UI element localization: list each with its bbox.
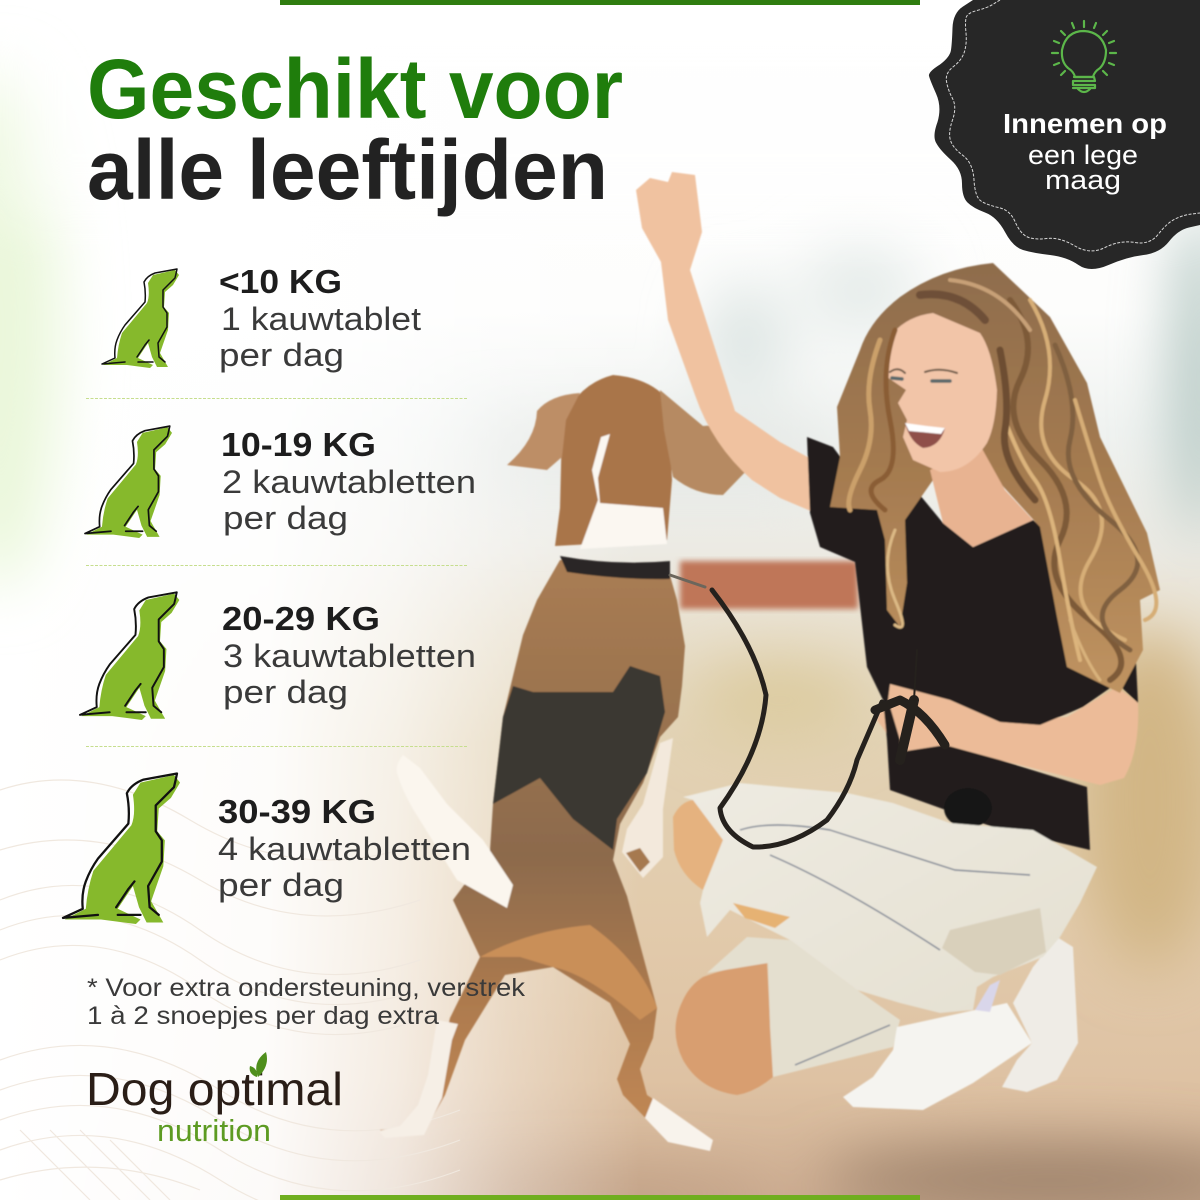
badge text [1003,108,1167,195]
icon: small dog [102,269,179,368]
footnote [87,974,526,1030]
dog collar [560,556,670,579]
row text: 2 kauwtabletten [222,464,476,500]
row text: per dag [219,337,344,373]
row text [218,793,471,903]
woman back shoe [1002,937,1078,1092]
dog rear foot right [645,1098,713,1151]
row text: per dag [223,500,348,536]
icon: extra large dog [63,774,180,924]
row text [222,600,476,710]
row text: 4 kauwtabletten [218,831,471,867]
logo [86,1052,343,1148]
woman hair strands [849,280,1156,680]
footnote: * Voor extra ondersteuning, verstrek [87,974,526,1002]
dog left ear [507,393,580,470]
woman jeans tear [733,903,790,928]
photo: woman [636,172,1160,1110]
woman upper jeans [683,783,1097,1013]
panel: dosage row 20-29 kg [80,592,476,720]
dog head and neck [555,375,672,546]
jeans seams [740,825,1030,1065]
badge text: een lege [1028,140,1138,170]
woman front shoe [843,1003,1032,1110]
panel: dosage row 30-39 kg [63,774,471,924]
row text [221,426,476,536]
woman lower jeans [707,937,900,1077]
row text: 20-29 KG [222,600,380,637]
row text: per dag [223,674,348,710]
woman eyes and brows [890,369,957,381]
woman neck [930,445,1033,547]
woman lower arm [877,684,1138,785]
dog white blaze [580,434,667,549]
dog front leg [622,738,673,878]
row text [219,263,421,373]
title: Geschikt voor [87,42,623,136]
woman hair [830,263,1160,693]
woman black shirt [807,437,1138,850]
dog body and legs [380,560,713,1150]
footnote: 1 à 2 snoepjes per dag extra [87,1002,439,1030]
row text: 10-19 KG [221,426,376,463]
woman mouth [905,423,945,448]
title [87,42,623,217]
woman face [887,313,997,472]
photo: beagle dog [379,375,752,1151]
title: alle leeftijden [87,123,608,217]
top green bar [280,0,920,5]
row text: per dag [218,867,344,903]
row text: 3 kauwtabletten [223,638,476,674]
logo: Dog optimal [86,1063,343,1115]
dog leash [670,575,945,847]
woman raised arm [636,172,835,520]
icon: light bulb [1052,21,1116,92]
woman sock [975,980,1000,1012]
dog rear foot left [379,1020,458,1138]
woman upper knee [673,800,723,890]
row text: 1 kauwtablet [221,301,421,337]
dog right ear [660,390,752,495]
panel: dosage row 10-19 kg [85,426,476,538]
badge text: Innemen op [1003,108,1167,139]
icon: leaves [250,1052,267,1077]
icon: large dog [80,592,179,720]
badge: empty stomach [929,0,1200,269]
panel: dosage row under 10 kg [102,263,421,373]
dog tan haunch [480,925,657,1020]
woman lower knee [676,963,773,1095]
bottom green bar [280,1195,920,1200]
icon: medium dog [85,426,172,538]
woman jeans pocket [942,908,1046,975]
dog black saddle [493,666,665,850]
row text: <10 KG [219,263,342,300]
dog tail [397,755,513,908]
background wave pattern [0,780,460,1200]
dog front paw pad [626,848,650,872]
row text: 30-39 KG [218,793,376,830]
logo: nutrition [157,1113,271,1148]
badge text: maag [1045,165,1121,195]
woman shirt knot [944,788,992,828]
